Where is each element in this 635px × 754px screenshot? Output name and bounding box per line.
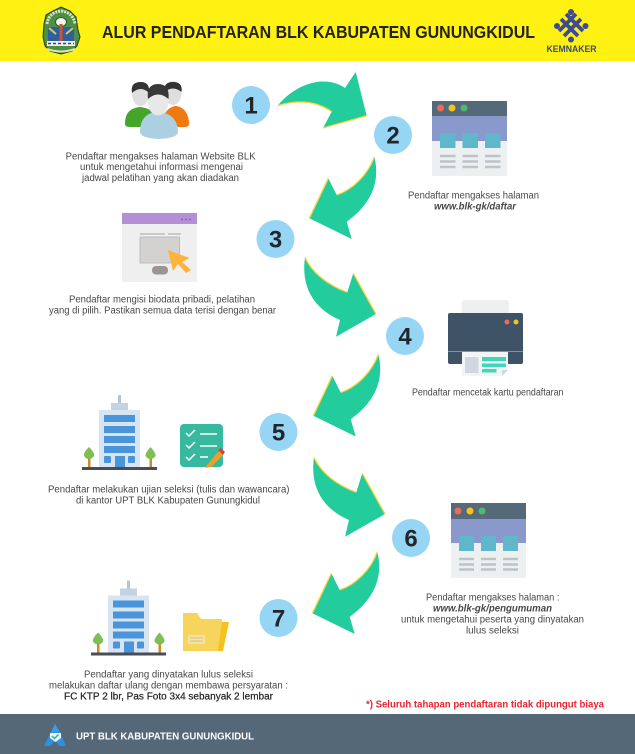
step 4 badge xyxy=(386,317,424,355)
icon: printer xyxy=(448,300,523,376)
text: step 6 description: untuk mengetahui peserta yang dinyatakan xyxy=(401,614,584,626)
text: step 7 description: melakukan daftar ulang dengan membawa persyaratan : xyxy=(49,680,288,692)
arrow: step 4 to 5 xyxy=(313,354,380,436)
text: step 7 description: Pendaftar yang dinyatakan lulus seleksi xyxy=(84,670,253,680)
arrow: step 1 to 2 xyxy=(278,72,367,128)
step 5 badge: 5 xyxy=(272,420,285,446)
text: step 6 description xyxy=(401,592,584,636)
step 2 badge xyxy=(374,116,412,154)
icon: office building (step 5) xyxy=(82,395,157,470)
icon: exam checklist with pencil xyxy=(180,424,225,468)
note: free of charge: *) Seluruh tahapan pendaftaran tidak dipungut biaya xyxy=(366,700,604,710)
step 4 badge: 4 xyxy=(398,324,412,350)
text: step 1 description: Pendaftar mengakses halaman Website BLK xyxy=(66,152,256,162)
step 7 badge xyxy=(260,599,298,637)
text: step 2 description: Pendaftar mengakses halaman xyxy=(408,190,539,202)
icon: group of users xyxy=(125,81,189,139)
footer band xyxy=(0,714,635,754)
text: step 4 description: Pendaftar mencetak kartu pendaftaran xyxy=(412,388,564,398)
step 3 badge: 3 xyxy=(269,226,282,254)
title: ALUR PENDAFTARAN BLK KABUPATEN GUNUNGKIDUL xyxy=(102,22,535,42)
text: step 5 description: Pendaftar melakukan ujian seleksi (tulis dan wawancara) xyxy=(48,484,290,496)
text: step 1 description: jadwal pelatihan yang akan diadakan xyxy=(81,173,239,184)
text: step 6 description: Pendaftar mengakses halaman : xyxy=(426,592,560,604)
icon: browser window (step 6) xyxy=(451,503,526,578)
text: step 6 description: lulus seleksi xyxy=(466,626,519,636)
icon: biodata form with cursor xyxy=(122,213,197,282)
step 6 badge: 6 xyxy=(404,526,418,552)
step 5 badge xyxy=(260,413,298,451)
text: step 1 description xyxy=(66,152,256,184)
footer text: UPT BLK KABUPATEN GUNUNGKIDUL xyxy=(76,730,255,742)
icon: Kemnaker logo xyxy=(546,9,597,55)
arrow: step 6 to 7 xyxy=(312,552,379,634)
text: step 2 description: www.blk-gk/daftar xyxy=(434,202,517,212)
text: step 7 description: FC KTP 2 lbr, Pas Foto 3x4 sebanyak 2 lembar xyxy=(64,692,274,702)
step 6 badge xyxy=(392,519,430,557)
text: step 5 description xyxy=(48,484,290,506)
icon: Kemnaker logo: KEMNAKER xyxy=(546,44,597,55)
step 2 badge: 2 xyxy=(386,122,400,150)
text: step 3 description: yang di pilih. Pastikan semua data terisi dengan benar xyxy=(49,306,277,316)
text: step 5 description: di kantor UPT BLK Kabupaten Gunungkidul xyxy=(76,496,260,506)
text: step 3 description: Pendaftar mengisi biodata pribadi, pelatihan xyxy=(69,294,255,306)
step 1 badge: 1 xyxy=(244,92,258,120)
arrow: step 3 to 4 xyxy=(304,257,376,337)
text: step 3 description xyxy=(49,294,277,316)
text: step 2 description xyxy=(408,190,539,212)
step 1 badge xyxy=(232,86,270,124)
icon: document folder xyxy=(183,613,229,651)
icon: office building (step 7) xyxy=(91,580,166,656)
icon: UPT BLK logo xyxy=(44,724,66,746)
text: step 7 description xyxy=(49,670,288,702)
step 7 badge: 7 xyxy=(272,606,285,632)
step 3 badge xyxy=(256,220,294,258)
icon: Gunungkidul regency crest xyxy=(43,7,80,54)
header band xyxy=(0,0,635,61)
arrow: step 5 to 6 xyxy=(313,457,385,537)
arrow: step 2 to 3 xyxy=(309,157,376,239)
icon: browser window (step 2) xyxy=(432,101,507,176)
text: step 1 description: untuk mengetahui informasi mengenai xyxy=(80,162,243,173)
text: step 6 description: www.blk-gk/pengumuman xyxy=(433,604,552,614)
